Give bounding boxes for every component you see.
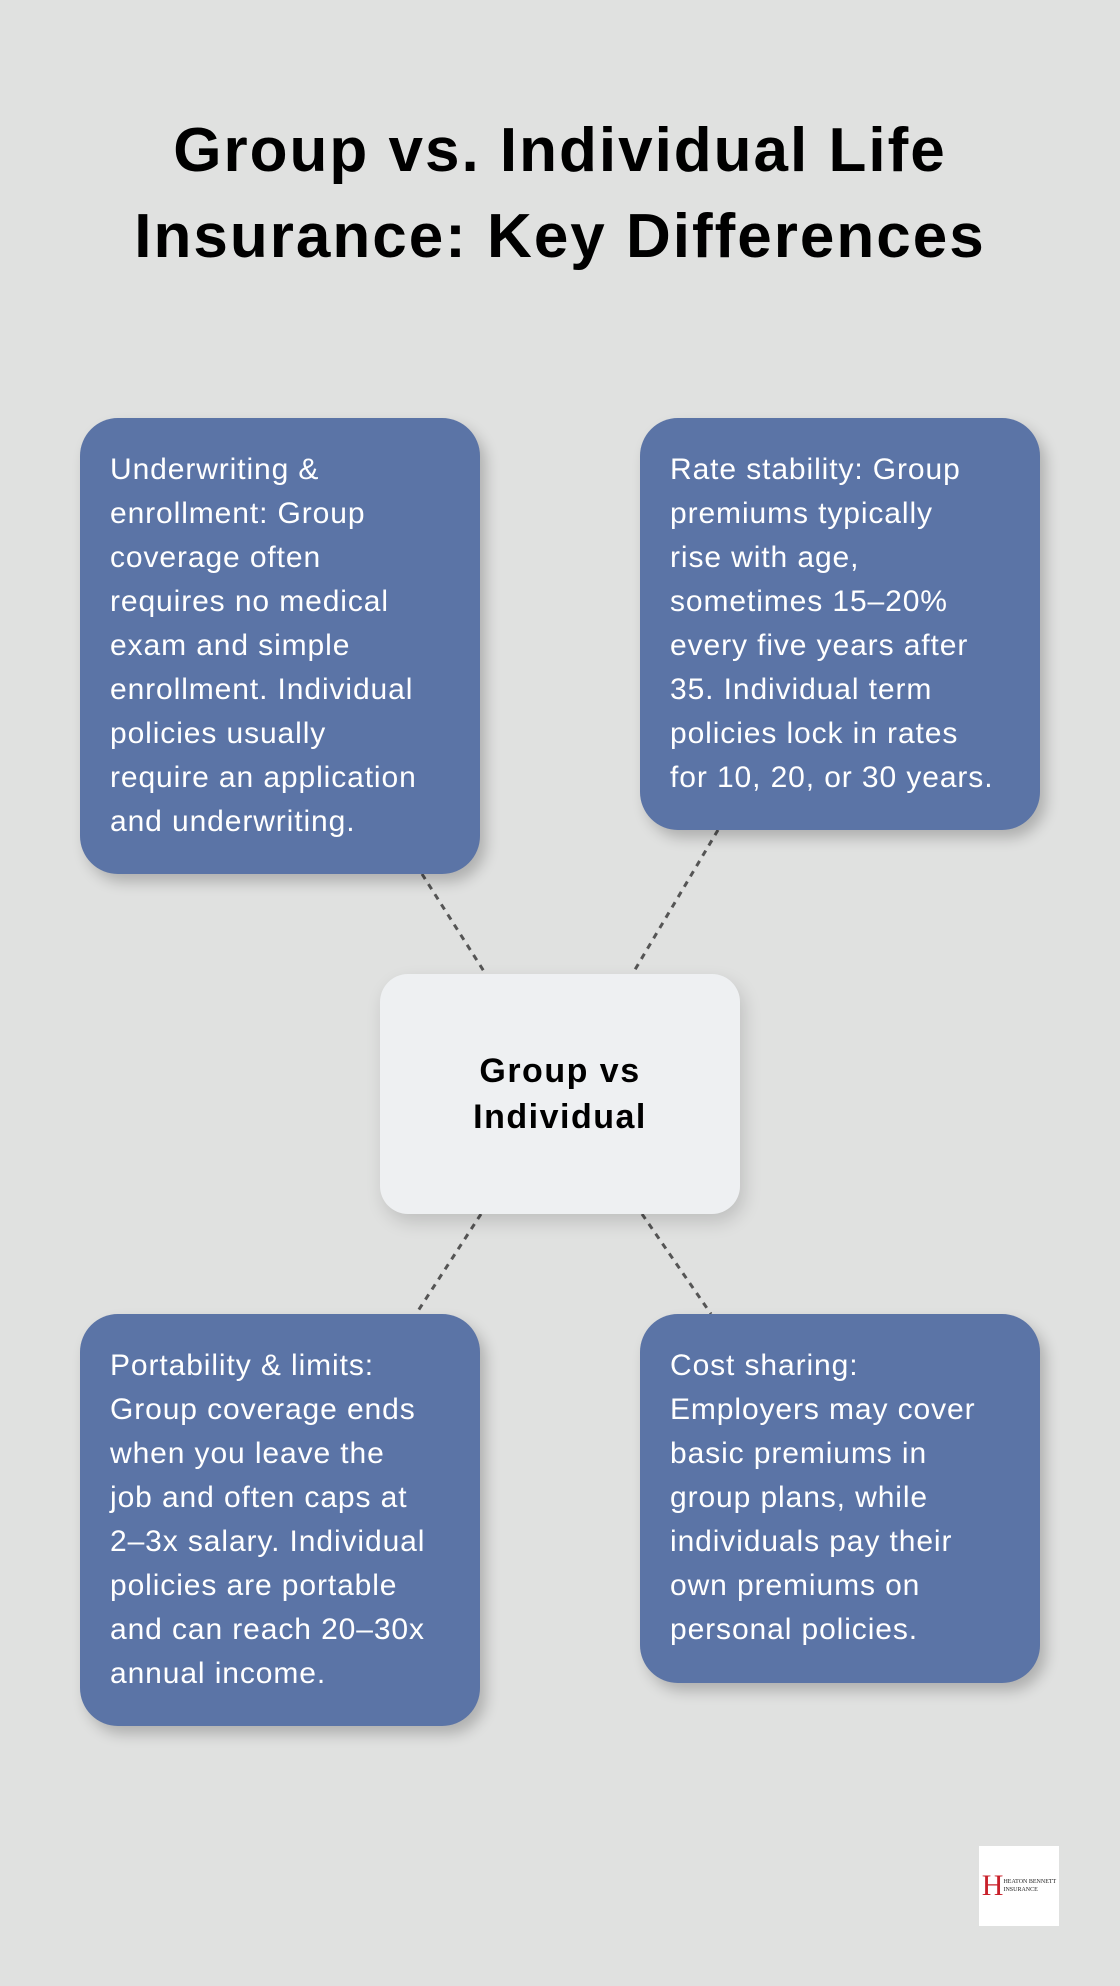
panel: cost sharing: individuals pay their [670, 1525, 952, 1558]
logo: H [982, 1869, 1003, 1902]
panel: portability: annual income. [110, 1657, 326, 1690]
panel: cost sharing: group plans, while [670, 1481, 928, 1514]
panel: underwriting: exam and simple [110, 629, 350, 662]
panel: underwriting: requires no medical [110, 585, 389, 618]
panel: underwriting: and underwriting. [110, 805, 355, 838]
panel: cost sharing: own premiums on [670, 1569, 920, 1602]
panel: underwriting: enrollment. Individual [110, 673, 413, 706]
panel: rate stability: 35. Individual term [670, 673, 932, 706]
panel: rate stability: Rate stability: Group [670, 453, 961, 486]
panel: portability: policies are portable [110, 1569, 397, 1602]
panel: underwriting: policies usually [110, 717, 326, 750]
title [134, 116, 986, 271]
panel: underwriting: require an application [110, 761, 417, 794]
panel: underwriting: Underwriting & [110, 453, 319, 486]
panel: underwriting [80, 418, 480, 874]
logo [979, 1846, 1059, 1926]
center node: Individual [473, 1098, 647, 1136]
panel: portability: and can reach 20–30x [110, 1613, 425, 1646]
center node [380, 974, 740, 1214]
panel: rate stability: sometimes 15–20% [670, 585, 948, 618]
panel: cost sharing: Employers may cover [670, 1393, 976, 1426]
panel: underwriting: enrollment: Group [110, 497, 365, 530]
panel: rate stability [640, 418, 1040, 830]
panel: portability: job and often caps at [110, 1481, 407, 1514]
panel: portability: when you leave the [110, 1437, 385, 1470]
panel: rate stability: rise with age, [670, 541, 859, 574]
logo: HEATON BENNETT [1003, 1879, 1056, 1885]
panel: cost sharing: personal policies. [670, 1613, 918, 1646]
logo: INSURANCE [1003, 1887, 1038, 1893]
panel: cost sharing: basic premiums in [670, 1437, 927, 1470]
panel: cost sharing: Cost sharing: [670, 1349, 858, 1382]
panel: rate stability: policies lock in rates [670, 717, 958, 750]
panel: portability: Portability & limits: [110, 1349, 374, 1382]
panel: rate stability: for 10, 20, or 30 years. [670, 761, 993, 794]
panel: portability: 2–3x salary. Individual [110, 1525, 425, 1558]
center node: Group vs [479, 1052, 641, 1090]
panel: rate stability: premiums typically [670, 497, 933, 530]
panel: portability: Group coverage ends [110, 1393, 416, 1426]
panel: rate stability: every five years after [670, 629, 968, 662]
panel: underwriting: coverage often [110, 541, 321, 574]
panel: cost sharing [640, 1314, 1040, 1683]
title: Insurance: Key Differences [134, 202, 986, 271]
title: Group vs. Individual Life [173, 116, 947, 185]
panel: portability [80, 1314, 480, 1726]
